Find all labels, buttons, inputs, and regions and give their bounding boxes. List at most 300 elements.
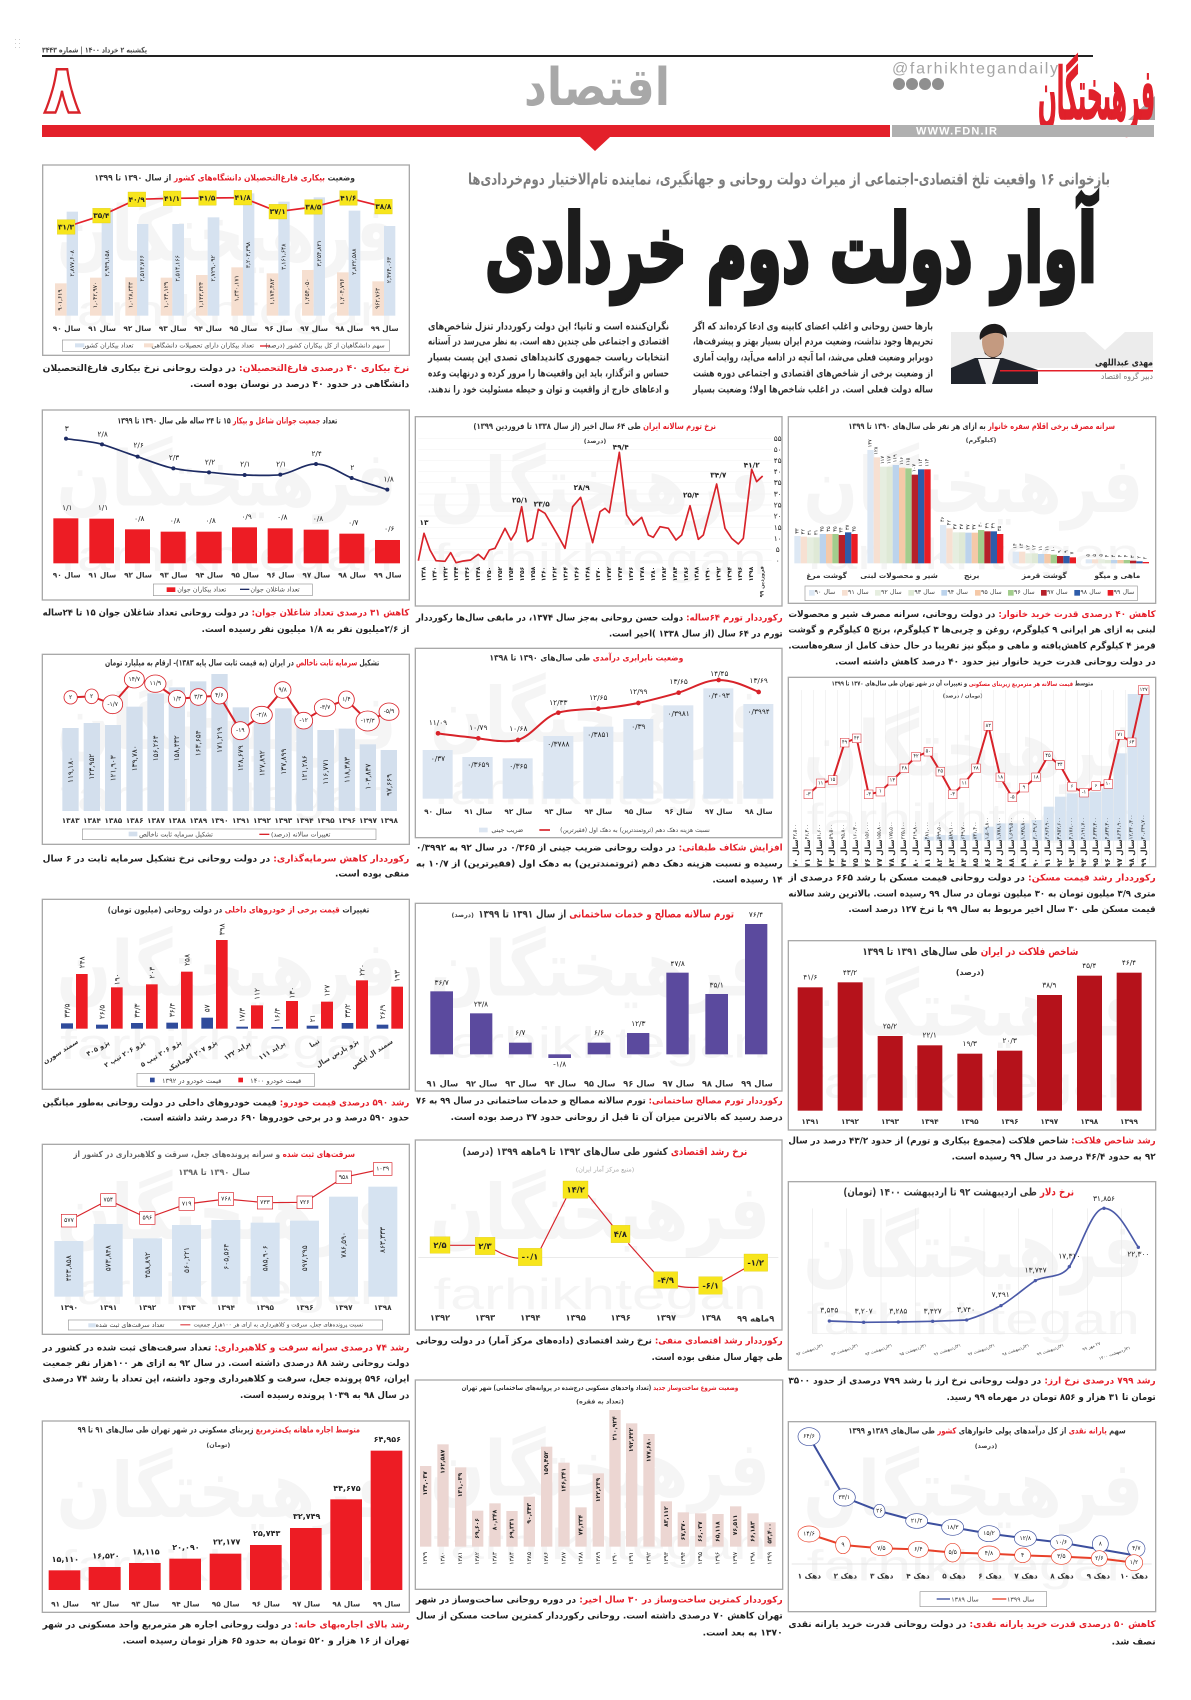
masthead [42, 46, 1155, 151]
caption: کاهش ۴۰ درصدی قدرت خرید خانوار: در دولت روحانی، سرانه مصرف شیر و محصولات [788, 610, 1156, 620]
bar values: ۵۶۰,۲۲۱ [182, 1247, 191, 1273]
chart title: متوسط قیمت سالانه هر مترمربع زیربنای مسکونی و تغییرات آن در شهر تهران طی سال‌های ۱۳۷۰ تا ۱۳۹۹ [832, 678, 1093, 687]
bar values: ۲۰/۳ [1003, 1036, 1017, 1045]
x axis: ۱۳۹۶ [296, 1303, 314, 1312]
caption: نرخ بیکاری ۴۰ درصدی فارغ‌التحصیلان: در دولت روحانی نرخ بیکاری فارغ‌التحصیلان [43, 364, 409, 374]
yellow value boxes [430, 1181, 768, 1294]
panel: youth employment [42, 410, 410, 635]
bar values: ۱۵۸,۴۳۲ [172, 735, 181, 761]
price values: ۱۵۶,۰۰۰ [865, 822, 871, 839]
x axis years: ۱۳۸۰ [439, 1552, 446, 1565]
unit label: (درصد) [956, 968, 984, 977]
legend: سال ۹۴ [947, 589, 968, 596]
bar values: ۲,۸۳۲,۵۸۸ [351, 248, 358, 275]
tiny bar values [794, 439, 1149, 559]
bar values: ۵۹۷,۲۹۵ [300, 1245, 309, 1271]
gini bars [423, 688, 773, 799]
tiny bar values: ۴۶ [940, 516, 946, 522]
change value boxes: ۴۲ [854, 735, 860, 741]
price values: ۵۹,۵۰۰ [829, 824, 835, 839]
value labels: ۱۲۷ [322, 985, 331, 997]
value labels: ۳۴/۳ [132, 1003, 141, 1018]
change value boxes: ۱۵ [830, 777, 836, 783]
panel: youth employment: فرهیختگان [57, 435, 397, 524]
chart title [78, 1424, 360, 1449]
panel: car prices: farhikhtegan [60, 1021, 393, 1069]
bar values: ۱,۰۴۲,۹۷۰ [92, 282, 99, 308]
caption: کاهش ۵۰ درصدی قدرت خرید یارانه نقدی: در دولت روحانی قدرت خرید یارانه نقدی [788, 1620, 1156, 1630]
change value boxes: ۲۸ [973, 765, 979, 771]
article column left: انتخابات ریاست جمهوری کاندیداهای تصدی این پست بسیار [427, 352, 669, 364]
bar values [803, 958, 1136, 1048]
panel: inflation: فرهیختگان [430, 442, 770, 531]
panel: economic growth [415, 1140, 783, 1363]
change value boxes: -۳ [866, 791, 871, 797]
x axis years: ۱۳۹۸ [749, 1551, 756, 1565]
x axis: دهک ۱۰ [1120, 1571, 1148, 1580]
bar values: ۱۲۸,۶۷۹ [236, 745, 245, 771]
legend: سال ۹۱ [848, 589, 869, 596]
line values: ۲/۱ [276, 459, 287, 468]
bar values: ۱/۱ [98, 503, 108, 512]
legend: سال ۹۹ [1114, 589, 1134, 596]
line value boxes: ۵۷۷ [64, 1217, 75, 1224]
peak values: ۲۳/۵ [534, 499, 550, 508]
change values: -۱۳/۳ [361, 717, 375, 724]
change value boxes: ۱۲۷ [1140, 687, 1148, 693]
x axis: ۱۳۹۸ [1080, 1117, 1099, 1126]
bar values: ۶۵,۱۱۸ [714, 1521, 721, 1542]
x axis: ۱۳۹۳ [881, 1117, 899, 1126]
x axis years: سال ۹۱ [1043, 839, 1052, 867]
yellow value boxes: -۶/۱ [702, 1281, 719, 1291]
x axis years: سال ۷۴ [839, 839, 848, 867]
article column left: و ادعاهای خارج از واقعیت و توان و حیطه مسئولیت خود را ندهند. [428, 384, 669, 396]
ratio values: ۱۰/۶۸ [509, 724, 527, 733]
y axis: ۲۰ [774, 511, 782, 520]
yellow value labels: ۳۸/۸ [375, 202, 392, 211]
caption [42, 1621, 409, 1647]
x axis years: ۱۳۴۰ [431, 567, 438, 581]
zero line [792, 1563, 1152, 1565]
tiny bar values: ۲ [1143, 556, 1149, 559]
bar values: ۴۶/۴ [1122, 958, 1136, 967]
bar values: ۲,۷۲۹,۰۹۲ [210, 255, 217, 281]
x axis: ۱۳۹۲ [253, 816, 271, 825]
line values: ۲۲,۳۰۰ [1127, 1249, 1149, 1258]
x axis: سال ۹۳ [505, 1079, 537, 1089]
legend: نسبت هزینه دهک دهم (ثروتمندترین) به دهک اول (فقیرترین) [560, 827, 710, 834]
change value boxes: ۸۲ [986, 723, 991, 729]
bar values: ۴۵۸,۸۹۲ [143, 1252, 152, 1278]
caption [788, 1137, 1156, 1162]
x axis years: سال ۹۴ [1079, 839, 1088, 867]
gini values: ۰/۳۷ [431, 754, 445, 763]
caption: رکورددار رشد اقتصادی منفی: نرخ رشد اقتصادی (داده‌های مرکز آمار) در دولت روحانی [416, 1335, 783, 1347]
x axis years: ۱۳۷۶ [628, 566, 635, 581]
bar values: ۳۵/۱ [710, 980, 724, 989]
bar values [66, 727, 393, 796]
line values [820, 1194, 1149, 1315]
dollar line [828, 1207, 1140, 1324]
bar values [62, 503, 395, 533]
bar values: ۱۵۹,۴۵۲ [543, 1451, 550, 1475]
change values: ۹/۸ [278, 686, 288, 693]
legend: سال ۹۷ [1047, 589, 1068, 596]
legend: تعداد سرقت‌های ثبت شده [96, 1322, 165, 1329]
x axis: سال ۹۵ [229, 324, 257, 333]
value labels: ۲۶/۹ [378, 1005, 387, 1019]
chart title [72, 1149, 355, 1177]
bar values: ۱۴۶,۳۴۱ [560, 1468, 567, 1492]
bar values: ۱۲۱,۹۰۳ [108, 755, 117, 781]
red banner [42, 125, 890, 151]
gini values: ۰/۳۸۵۱ [587, 730, 609, 739]
panel: car prices [42, 899, 409, 1124]
bar values: ۷۸۶,۵۹۰ [339, 1232, 348, 1258]
tiny bar values: ۳۳ [794, 528, 800, 534]
chart title: شاخص فلاکت در ایران طی سال‌های ۱۳۹۱ تا ۱۳۹۹ [862, 946, 1078, 958]
x axis years: سال ۹۵ [1091, 839, 1100, 867]
bar values: ۵۳,۴۰۰ [766, 1523, 773, 1544]
line value boxes: ۷۳۳ [260, 1199, 271, 1206]
bar values: ۱۰۳,۸۳۷ [363, 764, 372, 790]
labels 1399: ۹ [841, 1541, 845, 1548]
caption [416, 1097, 783, 1123]
bar values: ۳۶/۷ [435, 978, 449, 987]
article column left: اقتصادی و اجتماعی طی چندین دهه است. به نظر می‌رسد در آستانه [428, 334, 669, 348]
x axis [430, 1312, 774, 1323]
price values: ۱۷۵,۵۰۰ [889, 822, 895, 839]
x axis years: سال ۷۱ [803, 839, 812, 867]
bars [420, 1410, 776, 1547]
panel: graduate unemployment: فرهیختگان [57, 190, 397, 279]
bar values: ۱۶,۵۲۰ [92, 1551, 120, 1560]
unit label: (درصد) [584, 438, 606, 445]
bar values: ۱۷۱,۲۱۹ [215, 727, 224, 753]
change value boxes: ۵۰ [926, 749, 931, 755]
x axis: ۱۳۸۷ [147, 816, 165, 825]
bar values: ۱۲۷,۸۹۲ [257, 750, 266, 776]
gini values [431, 691, 770, 770]
tiny bar values: ۳۱ [813, 530, 819, 535]
panel: youth employment: farhikhtegan [60, 533, 393, 581]
x axis years: ۱۳۴۴ [453, 566, 460, 581]
y axis: ۰ [776, 556, 780, 565]
section title: اقتصاد [524, 58, 670, 118]
bar values: ۲۱۰,۹۲۴ [611, 1416, 618, 1440]
value labels: ۱۱۲ [252, 988, 261, 1000]
panel: construction materials inflation [415, 903, 783, 1123]
tiny bar values: ۷ [1070, 551, 1076, 554]
price values: ۲,۰۴۹,۲۰۰ [1033, 817, 1039, 839]
bar values: ۰/۸ [134, 514, 145, 523]
caption [43, 364, 410, 390]
line values: ۳,۲۰۷ [855, 1306, 873, 1315]
article column right [692, 320, 933, 396]
panel: new construction: فرهیختگان [430, 1425, 770, 1514]
unit label: (کیلوگرم) [966, 436, 997, 444]
bar values [64, 1227, 387, 1281]
bar values: ۸۳,۱۱۲ [663, 1506, 670, 1527]
x axis: ۱۳۹۴ [921, 1117, 939, 1126]
bar values: ۰/۸ [170, 516, 180, 525]
unit label: (درصد) [451, 912, 474, 919]
chart title: سهم یارانه نقدی از کل درآمدهای پولی خانوارهای کشور طی سال‌های ۱۳۸۹و ۱۳۹۹ [848, 1425, 1126, 1437]
price values: ۸,۲۴۱,۹۰۰ [1117, 817, 1123, 839]
unit label: (درصد) [975, 1443, 997, 1450]
bar values: ۳۲,۷۴۹ [293, 1512, 320, 1521]
bar values: ۲۵,۷۴۳ [253, 1529, 280, 1538]
tiny bar values: ۱۰۷ [912, 464, 918, 472]
y axis: ۱۵ [774, 523, 782, 532]
bar values: ۹۰۱,۶۱۹ [57, 289, 64, 311]
tiny bar values: ۵ [1086, 554, 1092, 557]
caption: نصف شد. [1112, 1637, 1156, 1647]
author photo [951, 324, 1038, 384]
labels 1389: ۱۸/۳ [947, 1524, 959, 1531]
legend: سال ۹۸ [1080, 589, 1101, 596]
panel: fixed capital formation: farhikhtegan [60, 773, 393, 821]
caption: در سال ۹۸ به ۱۰۳۹ پرونده رسیده است. [240, 1391, 410, 1401]
x axis: ۱۳۹۶ [610, 1312, 631, 1322]
bar values: ۱۲۳,۹۵۲ [87, 754, 96, 780]
panel: inflation [415, 417, 783, 639]
bar values: ۱۲۱,۲۸۶ [300, 755, 309, 781]
x axis [801, 1117, 1138, 1126]
x axis: ۱۳۹۲ [841, 1117, 859, 1126]
chart title: سرانه مصرف برخی اقلام سفره خانوار به ازای هر نفر طی سال‌های ۱۳۹۰ تا ۱۳۹۹ [848, 421, 1115, 432]
caption: لبنی به ازای هر ایرانی ۹ کیلوگرم، روغن و چربی‌ها ۳ کیلوگرم، برنج ۵ کیلوگرم و گوشت [788, 624, 1156, 636]
x axis years: سال ۷۲ [815, 839, 824, 867]
ratio values: ۱۳/۶۵ [670, 677, 688, 686]
bar values: ۹۰,۳۴۳ [526, 1503, 533, 1524]
change value boxes: ۴۹ [842, 740, 848, 746]
x axis: سال ۹۴ [172, 1599, 200, 1608]
x axis years: ۱۳۸۰ [650, 567, 657, 581]
labels 1399: ۶/۴ [914, 1546, 923, 1553]
labels 1399: ۱۴/۶ [803, 1530, 815, 1537]
change value boxes: ۲۵ [938, 769, 943, 775]
labels 1399: ۷/۵ [877, 1545, 886, 1552]
chart title: سرقت‌های ثبت شده و سرانه پرونده‌های جعل، سرقت و کلاهبرداری در کشور از [72, 1149, 355, 1160]
gini values: ۰/۳۶۵ [509, 761, 527, 770]
chart title: وضعیت نابرابری درآمدی طی سال‌های ۱۳۹۰ تا ۱۳۹۸ [489, 652, 683, 664]
bar values: ۹۷,۶۶۹ [384, 774, 393, 796]
unit label: (تومان / درصد) [943, 694, 983, 700]
author block [951, 324, 1153, 384]
tiny bar values: ۳۷ [965, 524, 971, 530]
change value boxes: ۴۲ [913, 754, 919, 760]
bar values: ۵۷۳,۸۴۸ [103, 1245, 112, 1271]
caption: قیمت مسکن طی ۳۰ سال اخیر مربوط به سال ۹۹ با نرخ ۱۲۷ درصد است. [848, 905, 1156, 915]
bar values: ۲۵/۲ [883, 1021, 897, 1030]
x axis years: سال ۹۰ [1031, 839, 1040, 867]
line values: ۱/۸ [383, 474, 394, 483]
x axis years: سال ۸۱ [923, 839, 932, 867]
rotated dates: ۳۱اردیبهشت ۹۶ [933, 1343, 962, 1358]
category labels: گوشت قرمز [1021, 571, 1067, 580]
yellow value labels: ۳۸/۵ [305, 202, 322, 211]
author background [951, 332, 1153, 368]
change value boxes: -۱ [1082, 790, 1086, 796]
x axis: سال ۹۶ [623, 1079, 655, 1089]
rotated axis labels: تیبا [308, 1037, 322, 1049]
change value boxes: ۳۴ [1057, 762, 1063, 768]
caption: تهران کاهش ۷۰ درصدی داشته است. روحانی رکورددار کمترین ساخت مسکن از سال [416, 1612, 783, 1622]
x axis years: سال ۸۶ [983, 839, 992, 867]
panel: food consumption: farhikhtegan [807, 531, 1140, 579]
x axis: دهک ۱ [798, 1571, 821, 1580]
line values: ۳ [65, 424, 69, 433]
caption: منفی بوده است. [335, 870, 409, 880]
labels 1389: ۳۳/۱ [838, 1494, 850, 1501]
y axis [418, 434, 782, 565]
bar values: ۱۱۶,۷۷۱ [321, 759, 330, 785]
category labels: برنج [964, 571, 980, 580]
caption [43, 1096, 409, 1124]
bar values: ۲,۹۴۹,۱۵۸ [104, 249, 111, 276]
line values [65, 424, 394, 483]
x axis years: ۱۳۵۰ [486, 567, 493, 581]
bar values: ۱۳۹,۷۸۰ [130, 745, 139, 771]
x axis years: ۱۳۹۴ [680, 1552, 687, 1565]
x axis: ۱۳۹۵ [961, 1117, 979, 1126]
bars [49, 1451, 402, 1590]
chart title: نرخ تورم سالانه ایران طی ۶۴ سال اخیر (از سال ۱۳۳۸ تا فروردین ۱۳۹۹) [473, 421, 716, 432]
x axis [51, 1599, 401, 1608]
chart title: نرخ دلار طی اردیبهشت ۹۲ تا اردیبهشت ۱۴۰۰ (تومان) [843, 1187, 1074, 1199]
price values: ۳۰,۲۳۹,۷۰۰ [1140, 815, 1146, 839]
panel: cash subsidy share: farhikhtegan [807, 1543, 1140, 1591]
bars: dairy [867, 450, 931, 563]
change values: ۲ [90, 693, 93, 700]
tiny bar values: ۱۱۷ [880, 456, 886, 464]
price values [793, 815, 1146, 839]
legend [82, 829, 376, 840]
tiny bar values: ۱۱۴ [918, 458, 924, 467]
bar values: ۹۶۲,۷۶۳ [374, 287, 381, 309]
bar values: ۰/۸ [205, 516, 216, 525]
labels 1389: ۸ [1099, 1540, 1103, 1547]
x axis: دهک ۵ [942, 1571, 966, 1580]
line values: ۲/۳ [169, 453, 179, 462]
legend: سال ۱۳۸۹ [951, 1596, 979, 1603]
x axis years: سال ۷۳ [827, 839, 836, 867]
article column right: از وضعیت برخی از شاخص‌های اقتصادی و اجتماعی دوره هشت [693, 368, 933, 380]
change value boxes: ۶۳ [1129, 739, 1135, 745]
peak values: ۲۵/۱ [512, 495, 528, 504]
price values: ۱,۶۹۹,۵۰۰ [1009, 817, 1015, 839]
y axis: ۴۰ [774, 467, 782, 476]
yellow value labels: ۴۱/۶ [340, 193, 356, 202]
value labels: ۱۳۰ [287, 987, 296, 999]
value labels: ۲۵۸ [182, 954, 191, 966]
bar values: ۱,۲۵۴,۰۵۰ [304, 279, 311, 305]
x axis years: ۱۳۴۲ [442, 566, 449, 581]
legend: قیمت خودرو ۱۴۰۰ [250, 1077, 301, 1085]
peak values [420, 442, 760, 527]
tiny bar values: ۴ [1105, 554, 1111, 557]
website bar [892, 125, 1154, 138]
labels 1389: ۱۲/۸ [1019, 1535, 1032, 1542]
x axis: سال ۹۲ [504, 807, 532, 816]
labels 1399: ۴ [1021, 1552, 1024, 1559]
panel: new construction: farhikhtegan [433, 1521, 767, 1569]
x axis years [422, 1551, 773, 1565]
line value boxes: ۱۰۳۹ [376, 1165, 389, 1172]
change value boxes [804, 686, 1149, 802]
article column left: حساس و اثرگذار، باید این واقعیت‌ها را مرور کرده و درنهایت وعده [428, 366, 669, 380]
value labels: ۲۰۳ [147, 967, 156, 979]
gini values: ۰/۳۹ [631, 722, 646, 731]
caption [788, 1620, 1156, 1647]
change value boxes: ۷۱ [1117, 732, 1123, 738]
legend [62, 340, 389, 351]
change value boxes: ۱۰ [1106, 781, 1111, 787]
bar values: ۲,۵۱۴,۱۶۶ [174, 255, 181, 281]
price values: ۳,۹۵۲,۶۰۰ [1057, 817, 1063, 839]
bars: red meat [1013, 552, 1076, 563]
bar values: ۴۵/۴ [1082, 961, 1097, 970]
tiny bar values: ۵ [1092, 554, 1098, 557]
tiny bar values: ۴ [1124, 554, 1130, 557]
bar values: ۴۳/۲ [843, 968, 857, 977]
change values: ۴/۶ [215, 692, 224, 699]
legend: ضریب جینی [491, 827, 523, 834]
panel: construction materials inflation: فرهیختگان [430, 925, 770, 1014]
tiny bar values: ۳۵ [820, 526, 826, 532]
x axis years: ۱۳۹۸ [748, 566, 755, 581]
date and issue line: یکشنبه ۲ خرداد ۱۴۰۰ | شماره ۳۴۴۳ [42, 46, 147, 56]
caption [788, 610, 1156, 668]
rotated axis labels: پژو ۲۰۶ تیپ ۲ [103, 1038, 147, 1069]
tiny bar values: ۳۷ [845, 524, 851, 530]
x axis years: سال ۸۸ [1007, 839, 1016, 867]
x axis: سال ۹۲ [123, 324, 151, 333]
yellow value labels: ۴۰/۹ [129, 195, 145, 204]
x axis years: سال ۸۰ [911, 839, 920, 867]
legend [153, 584, 312, 596]
caption [43, 608, 410, 635]
legend: تغییرات سالانه (درصد) [271, 831, 331, 838]
tiny bar values: ۳۵ [826, 526, 832, 532]
bar values: ۱۳۷,۸۹۹ [279, 749, 288, 775]
caption: تومان تا ۳۱ هزار و ۸۵۶ تومان در مهرماه ۹۹ رسید. [947, 1393, 1156, 1403]
rotated axis labels [42, 1037, 394, 1073]
change value boxes: ۹ [1023, 785, 1026, 791]
tiny bar values: ۳۷ [972, 524, 978, 530]
bar values: ۱۵۶,۲۶۴ [151, 735, 160, 761]
rotated axis labels: سمند ال ایکس [350, 1037, 394, 1071]
zero line [418, 1256, 778, 1258]
x axis: سال ۹۱ [464, 807, 492, 816]
bar values: ۱۲۲,۲۳۹ [595, 1478, 602, 1502]
price values: ۴,۱۹۱,۷۰۰ [1081, 817, 1087, 839]
x axis years: سال ۷۸ [887, 839, 896, 867]
x axis years: سال ۷۹ [899, 839, 908, 867]
value labels: ۳۹۸ [217, 923, 226, 935]
bars: rice [940, 525, 1003, 563]
panel: economic growth: فرهیختگان [430, 1169, 770, 1258]
x axis years: سال ۹۲ [1055, 839, 1064, 867]
x axis years: سال ۷۶ [863, 839, 872, 867]
x axis: ۱۳۹۱ [232, 816, 250, 825]
caption [416, 844, 783, 886]
price values: ۵۹۹,۵۰۰ [937, 822, 943, 839]
peak values: ۲۵/۴ [683, 490, 700, 499]
article column right: دوبرابر وضعیت فعلی می‌شد، اما آنچه در ادامه می‌آید، روایت آماری [693, 350, 933, 364]
